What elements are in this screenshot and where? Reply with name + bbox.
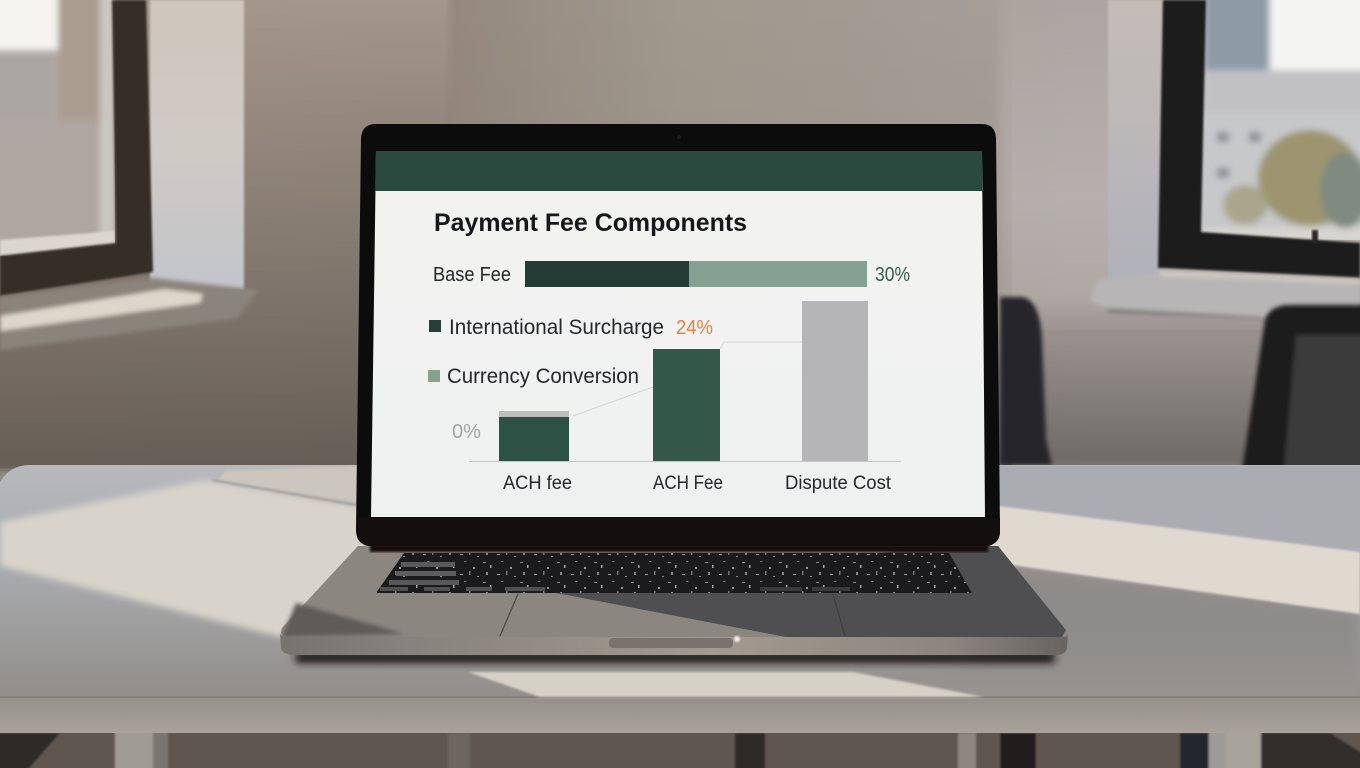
trackpad [500,594,845,636]
table [0,465,1360,733]
bar: ACH Fee [653,349,720,461]
base fee bar light segment [689,261,867,287]
legend value: 24%: 24% [676,317,713,339]
category label: ACH Fee: ACH Fee [653,473,723,494]
right window [1090,0,1360,322]
laptop base [280,546,1068,655]
axis value label: 0% [452,421,481,443]
camera [677,135,681,139]
legend label: international surcharge: International Surcharge [449,316,664,339]
right window sill [1090,270,1360,322]
category label: ACH fee: ACH fee [503,473,572,494]
legend [428,316,713,388]
laptop shadow [295,652,1055,663]
chart title: Payment Fee Components [434,209,747,237]
header band [375,151,982,191]
right window latch [1312,230,1318,243]
legend label: currency conversion: Currency Conversion [447,365,639,388]
floor under table [0,725,1360,768]
base fee value: 30% [875,264,910,286]
laptop front lip [280,632,1068,655]
base shadow wedge [551,546,1066,637]
chair right [1242,305,1360,470]
right window frame [1158,0,1360,278]
legend swatch: international surcharge [429,320,441,332]
table top shadow upper right [990,466,1360,552]
legend swatch: currency conversion [428,370,440,382]
bar: ACH fee [499,411,569,461]
status light [734,636,740,642]
left window [0,0,258,350]
left window sill [0,278,258,350]
sun beam front [468,672,984,697]
sun beam left [0,480,370,650]
category label: Dispute Cost: Dispute Cost [785,473,892,494]
connector lines [573,342,802,416]
left window view [0,0,120,260]
chair left [1000,297,1052,465]
hinge shadow [370,545,988,552]
base fee label: Base Fee [433,264,511,286]
table top [0,465,1360,700]
keyboard [376,553,972,593]
laptop lid [356,124,1000,546]
sun beam right [990,505,1360,614]
front notch [609,638,733,648]
back wall [0,0,1360,470]
base fee bar dark segment [525,261,689,287]
bar: Dispute Cost [802,301,868,461]
left window frame [0,0,153,296]
axis baseline [469,460,901,462]
screen background [371,151,985,517]
base fee row [433,261,910,287]
screen [371,151,985,517]
table front edge [0,697,1360,733]
laptop [280,124,1068,663]
table top right shadow [1014,565,1360,660]
right window view [1190,0,1360,250]
bar chart [452,301,901,494]
